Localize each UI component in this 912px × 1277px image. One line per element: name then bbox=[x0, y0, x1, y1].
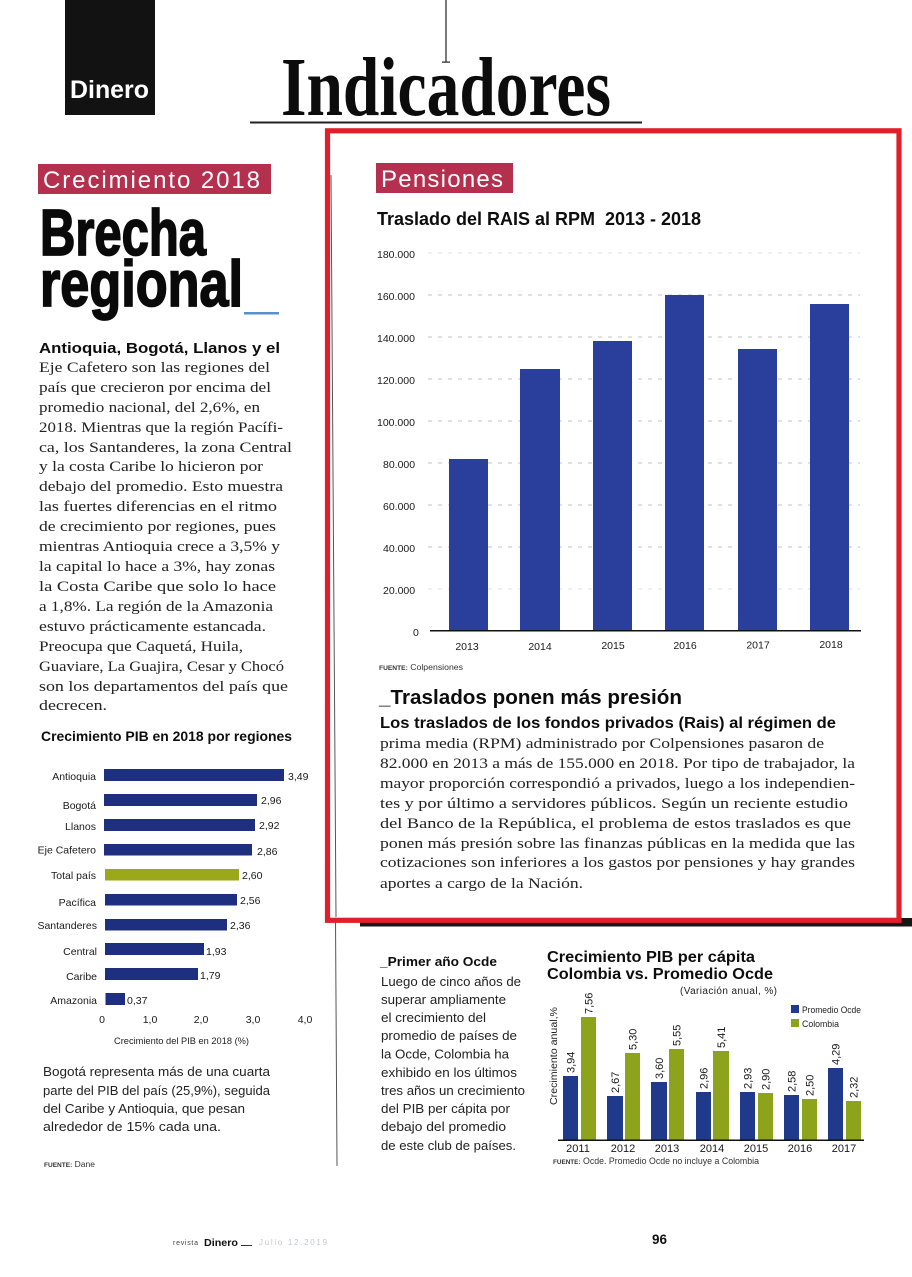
note: Bogotá share of PIB: alrededor de 15% cada una. bbox=[43, 1119, 221, 1134]
note: Bogotá share of PIB: parte del PIB del país (25,9%), seguida bbox=[43, 1083, 271, 1098]
bar chart: transfers 2013-2018: 2018 bbox=[819, 639, 843, 651]
headline: Brecha regional bbox=[40, 196, 279, 320]
article text: regional growth: de crecimiento por regiones, pues bbox=[39, 519, 276, 535]
bar chart: transfers 2013-2018: 180.000 bbox=[377, 249, 415, 261]
bar chart: PIB growth by region: Total país bbox=[51, 870, 96, 882]
bar chart: PIB growth by region: Llanos bbox=[65, 821, 96, 833]
article text: pension transfers: tes y por último a servidores públicos. Según un reciente estudio bbox=[380, 796, 848, 812]
chart: PIB per cápita, Colombia vs Ocde: 2,67 bbox=[610, 1072, 622, 1093]
chart: PIB per cápita, Colombia vs Ocde: 2011 bbox=[566, 1143, 590, 1155]
chart: PIB per cápita, Colombia vs Ocde: 2013 bbox=[655, 1143, 679, 1155]
article text: pension transfers: ponen más presión sobre las finanzas públicas en la medida que las bbox=[380, 836, 855, 852]
note: Bogotá share of PIB: Bogotá representa más de una cuarta bbox=[43, 1064, 271, 1079]
article text: pension transfers: cotizaciones son inferiores a los gastos por pensiones y hay grandes bbox=[380, 855, 855, 871]
bar chart: transfers 2013-2018: 120.000 bbox=[377, 375, 415, 387]
bar chart: transfers 2013-2018: 160.000 bbox=[377, 291, 415, 303]
chart heading: Crecimiento PIB per cápita bbox=[547, 949, 755, 966]
legend: Promedio Ocde bbox=[802, 1005, 861, 1016]
bar chart: PIB growth by region: Santanderes bbox=[37, 920, 97, 932]
footer: magazine credit: Dinero bbox=[204, 1237, 238, 1249]
panel: Pensiones, red highlight frame bbox=[328, 131, 899, 920]
article text: pension transfers bbox=[380, 715, 855, 892]
chart: PIB per cápita, Colombia vs Ocde: 5,41 bbox=[716, 1027, 728, 1048]
chart: PIB per cápita, Colombia vs Ocde: 7,56 bbox=[584, 993, 596, 1014]
chart: PIB per cápita, Colombia vs Ocde: 2,90 bbox=[760, 1069, 772, 1090]
bar chart: transfers 2013-2018: 2014 bbox=[528, 641, 552, 653]
bar chart: PIB growth by region: 2,96 bbox=[261, 795, 282, 807]
chart heading: (Variación anual, %) bbox=[680, 986, 777, 997]
source: Ocde: FUENTE: Ocde. Promedio Ocde no incluye a Colombia bbox=[553, 1156, 759, 1166]
sidebar text: Primer año Ocde: _Primer año Ocde bbox=[379, 955, 497, 969]
article text: pension transfers: prima media (RPM) administrado por Colpensiones pasaron de bbox=[380, 736, 824, 752]
bar chart: PIB growth by region: 2,56 bbox=[240, 895, 261, 907]
sidebar text: Primer año Ocde: del PIB per cápita por bbox=[381, 1101, 511, 1116]
article text: pension transfers: del Banco de la República, el problema de estos traslados es que bbox=[380, 816, 851, 832]
chart: PIB per cápita, Colombia vs Ocde: 2,93 bbox=[742, 1068, 754, 1089]
legend bbox=[791, 1005, 861, 1030]
footer: magazine credit: revista bbox=[173, 1240, 198, 1247]
sidebar text: Primer año Ocde: promedio de países de bbox=[381, 1028, 517, 1043]
sidebar text: Primer año Ocde: tres años un crecimiento bbox=[381, 1083, 525, 1098]
article text: regional growth: son los departamentos del país que bbox=[39, 679, 288, 695]
bar chart: PIB growth by region: 1,79 bbox=[200, 970, 221, 982]
subheading: Traslados ponen más presión: _Traslados ponen más presión bbox=[378, 686, 682, 709]
chart title: Crecimiento PIB en 2018 por regiones bbox=[41, 729, 292, 744]
bar chart: transfers 2013-2018: 100.000 bbox=[377, 417, 415, 429]
bar chart: transfers 2013-2018: 0 bbox=[413, 627, 419, 639]
bar chart: PIB growth by region: Pacífica bbox=[59, 897, 96, 909]
sidebar text: Primer año Ocde: superar ampliamente bbox=[381, 992, 506, 1007]
source: Colpensiones: FUENTE: Colpensiones bbox=[379, 662, 463, 672]
masthead: Dinero logo tab bbox=[65, 0, 155, 115]
chart: PIB per cápita, Colombia vs Ocde: 2015 bbox=[744, 1143, 768, 1155]
article text: regional growth: y la costa Caribe lo hicieron por bbox=[39, 459, 263, 475]
axis label: Crecimiento anual,% bbox=[548, 1007, 560, 1105]
chart: PIB per cápita, Colombia vs Ocde: 3,60 bbox=[654, 1058, 666, 1079]
note: Bogotá share of PIB: del Caribe y Antioquia, que pesan bbox=[43, 1101, 245, 1116]
bar chart: PIB growth by region: Caribe bbox=[66, 971, 97, 983]
sidebar text: Primer año Ocde: el crecimiento del bbox=[381, 1010, 486, 1025]
article text: regional growth: promedio nacional, del 2,6%, en bbox=[39, 400, 261, 416]
chart title: Traslado del RAIS al RPM: Traslado del RAIS al RPM 2013 - 2018 bbox=[377, 209, 701, 229]
masthead: Dinero logo tab: Dinero bbox=[70, 76, 149, 104]
legend: Colombia bbox=[802, 1019, 840, 1030]
article text: regional growth: la Costa Caribe que solo lo hace bbox=[39, 579, 276, 595]
black strip under highlighted panel bbox=[360, 918, 912, 926]
footer: magazine credit: Julio 12.2019 bbox=[259, 1238, 328, 1247]
footer: magazine credit bbox=[173, 1237, 328, 1249]
article text: pension transfers: 82.000 en 2013 a más de 155.000 en 2018. Por tipo de trabajador, la bbox=[380, 756, 855, 772]
chart: PIB per cápita, Colombia vs Ocde: 2012 bbox=[611, 1143, 635, 1155]
article text: regional growth bbox=[39, 340, 292, 714]
article text: regional growth: Eje Cafetero son las regiones del bbox=[39, 360, 270, 376]
section tag: Crecimiento 2018: Crecimiento 2018 bbox=[43, 167, 260, 194]
article text: regional growth: estuvo prácticamente estancada. bbox=[39, 619, 266, 635]
article text: pension transfers: mayor proporción correspondió a privados, luego a los independien- bbox=[380, 776, 855, 792]
article text: regional growth: ca, los Santanderes, la zona Central bbox=[39, 440, 292, 456]
vertical divider segment inside frame bbox=[331, 175, 336, 917]
bar chart: PIB growth by region: 1,93 bbox=[206, 946, 227, 958]
bar chart: transfers 2013-2018: 2015 bbox=[601, 640, 625, 652]
source: Dane: FUENTE: Dane bbox=[44, 1159, 95, 1169]
sidebar text: Primer año Ocde: Luego de cinco años de bbox=[381, 974, 521, 989]
article text: regional growth: las fuertes diferencias en el ritmo bbox=[39, 499, 277, 515]
article text: regional growth: la capital lo hace a 3%, hay zonas bbox=[39, 559, 275, 575]
bar chart: PIB growth by region: 0,37 bbox=[127, 995, 148, 1007]
bar chart: PIB growth by region: 2,86 bbox=[257, 846, 278, 858]
bar chart: PIB growth by region: Amazonia bbox=[50, 995, 97, 1007]
chart heading bbox=[547, 949, 777, 997]
section tag: Pensiones: Pensiones bbox=[381, 166, 503, 193]
bar chart: PIB growth by region: 2,0 bbox=[194, 1014, 208, 1026]
article text: regional growth: Preocupa que Caquetá, Huila, bbox=[39, 639, 243, 655]
page number: 96 bbox=[652, 1231, 667, 1247]
bar chart: PIB growth by region: Antioquia bbox=[52, 771, 96, 783]
bar chart: PIB growth by region: 3,49 bbox=[288, 771, 309, 783]
article text: regional growth: Guaviare, La Guajira, Cesar y Chocó bbox=[39, 659, 284, 675]
bar chart: PIB growth by region: 4,0 bbox=[298, 1014, 312, 1026]
bar chart: transfers 2013-2018: 40.000 bbox=[383, 543, 415, 555]
chart: PIB per cápita, Colombia vs Ocde: 2,32 bbox=[848, 1077, 860, 1098]
chart: PIB per cápita, Colombia vs Ocde: 2,58 bbox=[786, 1071, 798, 1092]
sidebar text: Primer año Ocde bbox=[379, 955, 525, 1153]
article text: regional growth: 2018. Mientras que la región Pacífi- bbox=[39, 420, 283, 436]
bar chart: transfers 2013-2018: 60.000 bbox=[383, 501, 415, 513]
bar chart: PIB growth by region: 2,92 bbox=[259, 820, 280, 832]
article text: pension transfers: Los traslados de los fondos privados (Rais) al régimen de bbox=[380, 715, 836, 732]
bar chart: PIB growth by region: 2,60 bbox=[242, 870, 263, 882]
bar chart: transfers 2013-2018: 2013 bbox=[455, 641, 479, 653]
bar chart: PIB growth by region bbox=[37, 729, 312, 1047]
article text: regional growth: decrecen. bbox=[39, 698, 107, 714]
bar chart: PIB growth by region: 1,0 bbox=[143, 1014, 157, 1026]
headline: Brecha regional: Brecha bbox=[40, 196, 207, 269]
bar chart: transfers 2013-2018: 80.000 bbox=[383, 459, 415, 471]
article text: regional growth: país que crecieron por encima del bbox=[39, 380, 271, 396]
chart: PIB per cápita, Colombia vs Ocde: 2014 bbox=[700, 1143, 724, 1155]
bar chart: PIB growth by region: Crecimiento del PIB en 2018 (%) bbox=[114, 1036, 249, 1047]
chart: PIB per cápita, Colombia vs Ocde: 2,50 bbox=[804, 1075, 816, 1096]
sidebar text: Primer año Ocde: debajo del promedio bbox=[381, 1119, 506, 1134]
chart: PIB per cápita, Colombia vs Ocde bbox=[547, 949, 864, 1166]
bar chart: transfers 2013-2018: 20.000 bbox=[383, 585, 415, 597]
note: Bogotá share of PIB bbox=[43, 1064, 271, 1134]
bar chart: PIB growth by region: 0 bbox=[99, 1014, 105, 1026]
bar chart: PIB growth by region: Eje Cafetero bbox=[38, 844, 96, 856]
bar chart: PIB growth by region: 2,36 bbox=[230, 920, 251, 932]
chart: PIB per cápita, Colombia vs Ocde: 4,29 bbox=[830, 1044, 842, 1065]
page title: Indicadores: Indicadores bbox=[281, 41, 611, 134]
chart: PIB per cápita, Colombia vs Ocde: 5,30 bbox=[628, 1029, 640, 1050]
left column vertical divider bbox=[331, 175, 337, 1166]
bar chart: transfers 2013-2018: 2016 bbox=[673, 640, 697, 652]
sidebar text: Primer año Ocde: exhibido en los últimos bbox=[381, 1065, 518, 1080]
article text: regional growth: debajo del promedio. Esto muestra bbox=[39, 479, 283, 495]
chart: PIB per cápita, Colombia vs Ocde: 2016 bbox=[788, 1143, 812, 1155]
bar chart: transfers 2013-2018 bbox=[377, 249, 861, 653]
article text: regional growth: Antioquia, Bogotá, Llanos y el bbox=[39, 340, 280, 357]
headline: Brecha regional: regional bbox=[40, 247, 243, 320]
sidebar text: Primer año Ocde: la Ocde, Colombia ha bbox=[381, 1046, 510, 1062]
bar chart: PIB growth by region: Bogotá bbox=[63, 800, 96, 812]
chart heading: Colombia vs. Promedio Ocde bbox=[547, 966, 773, 983]
article text: regional growth: a 1,8%. La región de la Amazonia bbox=[39, 599, 273, 615]
bar chart: transfers 2013-2018: 140.000 bbox=[377, 333, 415, 345]
article text: pension transfers: aportes a cargo de la Nación. bbox=[380, 876, 583, 892]
chart: PIB per cápita, Colombia vs Ocde: 3,94 bbox=[566, 1052, 578, 1073]
bar chart: PIB growth by region: Central bbox=[63, 946, 97, 958]
chart: PIB per cápita, Colombia vs Ocde: 5,55 bbox=[672, 1025, 684, 1046]
sidebar text: Primer año Ocde: de este club de países. bbox=[381, 1138, 516, 1153]
bar chart: transfers 2013-2018: 2017 bbox=[746, 640, 770, 652]
chart: PIB per cápita, Colombia vs Ocde: 2017 bbox=[832, 1143, 856, 1155]
bar chart: PIB growth by region: 3,0 bbox=[246, 1014, 260, 1026]
chart: PIB per cápita, Colombia vs Ocde: 2,96 bbox=[698, 1068, 710, 1089]
article text: regional growth: mientras Antioquia crece a 3,5% y bbox=[39, 539, 281, 555]
